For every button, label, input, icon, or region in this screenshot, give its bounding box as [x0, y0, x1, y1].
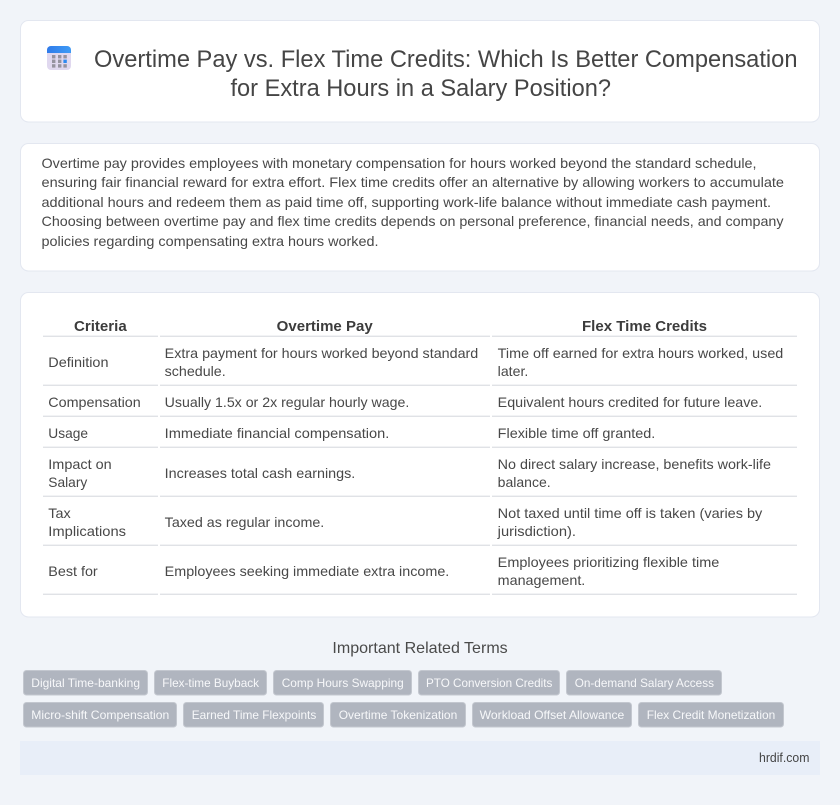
row: usage: Usage: [48, 425, 88, 441]
row: impact on salary: [48, 456, 771, 490]
tag list: [24, 670, 784, 727]
row: tax implications: Not taxed until time off is taken (varies by: [498, 505, 762, 521]
table header: Overtime Pay: [277, 319, 373, 335]
row: best for: Best for: [48, 563, 98, 579]
row: tax implications: jurisdiction).: [497, 523, 576, 539]
row: compensation: [48, 394, 762, 410]
row: impact on salary: No direct salary increase, benefits work-life: [498, 456, 771, 472]
heading: Overtime Pay vs. Flex Time Credits: Which Is Better Compensation: [94, 46, 798, 73]
tag: Overtime Tokenization: Overtime Tokenization: [339, 708, 457, 722]
table header: Flex Time Credits: [582, 319, 707, 335]
tag: Digital Time-banking: [24, 670, 148, 695]
text block: summary: policies regarding compensating extra hours worked.: [42, 233, 378, 249]
row: definition: [48, 345, 783, 379]
panel: title header: [20, 20, 820, 122]
row: definition: Definition: [48, 354, 108, 370]
heading: important related terms: Important Related Terms: [332, 640, 508, 657]
row: usage: Flexible time off granted.: [498, 425, 655, 441]
tag: Workload Offset Allowance: [472, 702, 632, 727]
row: tax implications: Taxed as regular income.: [165, 514, 324, 530]
tag: Comp Hours Swapping: [274, 670, 412, 695]
row: tax implications: [48, 505, 762, 539]
text block: summary: ensuring fair financial reward for extra effort. Flex time credits offer an alternative by allowing workers to accumulate: [42, 174, 784, 190]
row: impact on salary: balance.: [498, 474, 551, 490]
row: tax implications: Tax: [48, 505, 71, 521]
row: best for: Employees prioritizing flexible time: [498, 554, 720, 570]
row: compensation: Equivalent hours credited for future leave.: [498, 394, 762, 410]
panel: summary paragraph: [20, 144, 820, 271]
tag: PTO Conversion Credits: PTO Conversion Credits: [426, 676, 552, 690]
text block: summary: additional hours and redeem them as paid time off, supporting work-life balance without immediate cash payment.: [42, 194, 771, 210]
tag: Flex-time Buyback: Flex-time Buyback: [162, 676, 260, 690]
tag: Digital Time-banking: Digital Time-banking: [31, 676, 140, 690]
row: impact on salary: Impact on: [48, 456, 112, 472]
tag: Earned Time Flexpoints: Earned Time Flexpoints: [192, 708, 316, 722]
text block: summary: Overtime pay provides employees with monetary compensation for hours worked beyond the standard schedule,: [42, 155, 756, 171]
table header: Criteria: [74, 319, 128, 335]
row: definition: Extra payment for hours worked beyond standard: [165, 345, 478, 361]
heading: for Extra Hours in a Salary Position?: [230, 75, 611, 102]
tag: On-demand Salary Access: [566, 670, 722, 695]
tag: PTO Conversion Credits: [418, 670, 560, 695]
panel: comparison table: [20, 292, 820, 617]
row: definition: Time off earned for extra hours worked, used: [498, 345, 783, 361]
row: tax implications: Implications: [48, 523, 126, 539]
row: definition: schedule.: [165, 363, 226, 379]
heading: [94, 46, 798, 102]
row: compensation: Compensation: [48, 394, 141, 410]
footer: [20, 741, 820, 775]
row: best for: Employees seeking immediate extra income.: [165, 563, 449, 579]
tag: Comp Hours Swapping: Comp Hours Swapping: [282, 676, 404, 690]
row: compensation: Usually 1.5x or 2x regular hourly wage.: [165, 394, 409, 410]
row: usage: [48, 425, 655, 441]
tag: Micro-shift Compensation: [24, 702, 176, 727]
tag: Workload Offset Allowance: Workload Offset Allowance: [480, 708, 625, 722]
tag: Flex Credit Monetization: [638, 702, 784, 727]
row: best for: [48, 554, 720, 588]
icon: calendar: [47, 46, 71, 70]
text block: summary: [42, 155, 784, 249]
tag: Earned Time Flexpoints: [184, 702, 324, 727]
tag: Flex-time Buyback: [154, 670, 266, 695]
tag: Micro-shift Compensation: Micro-shift Compensation: [31, 708, 169, 722]
row: impact on salary: Increases total cash earnings.: [165, 465, 355, 481]
tag: Flex Credit Monetization: Flex Credit Monetization: [647, 708, 775, 722]
row: definition: later.: [498, 363, 528, 379]
text block: summary: Choosing between overtime pay and flex time credits depends on personal preference, financial needs, and company: [42, 213, 784, 229]
tag: Overtime Tokenization: [330, 702, 466, 727]
row: usage: Immediate financial compensation.: [165, 425, 389, 441]
footer: hrdif.com: [759, 751, 809, 765]
tag: On-demand Salary Access: On-demand Salary Access: [575, 676, 714, 690]
table header: [74, 319, 707, 335]
row: impact on salary: Salary: [48, 474, 87, 490]
row: best for: management.: [498, 572, 585, 588]
